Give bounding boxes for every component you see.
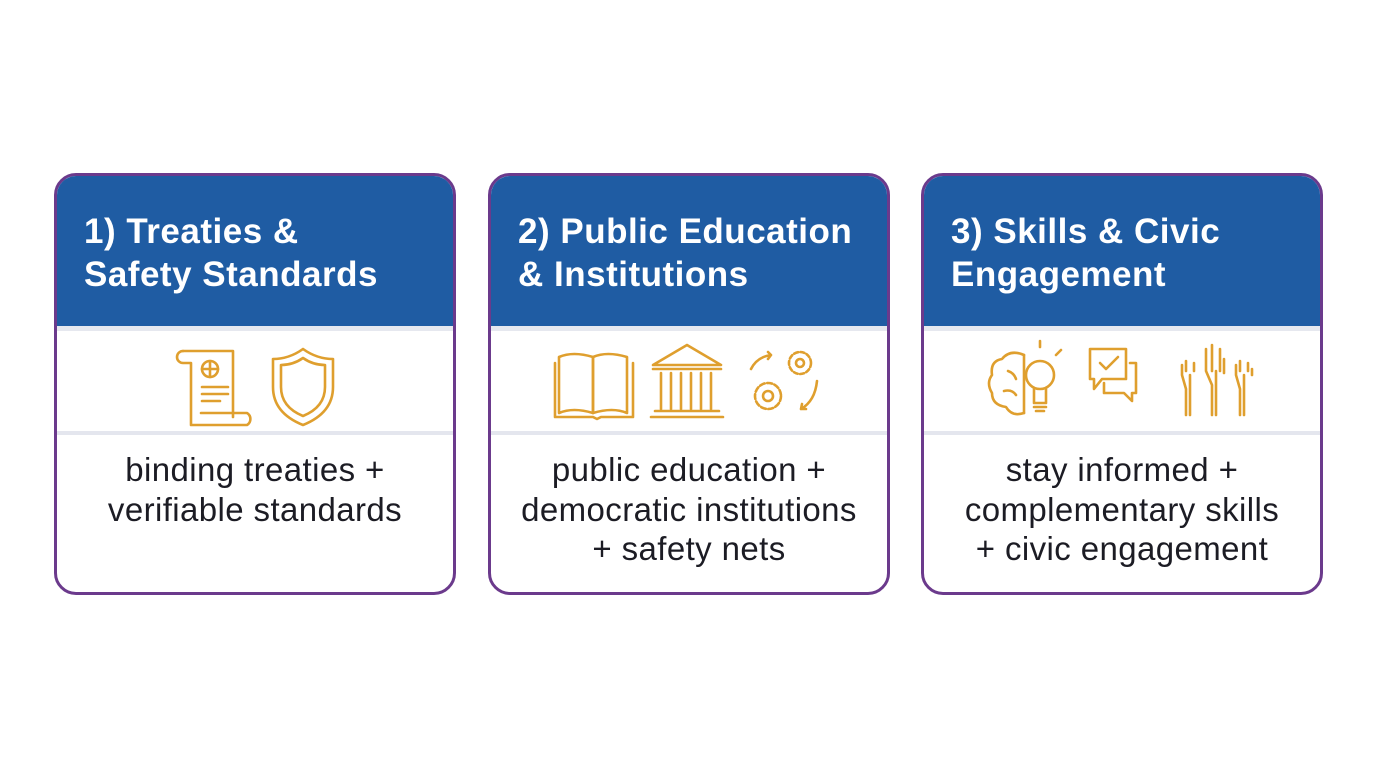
- text 3: [965, 451, 1279, 567]
- icons 3: [988, 340, 1254, 416]
- text 2: democratic institutions: [521, 490, 857, 528]
- icon: treaty scroll: [177, 351, 250, 425]
- header 2: [491, 176, 887, 331]
- header 1: [57, 176, 453, 331]
- icon: gears: [751, 352, 817, 409]
- icons 2: [554, 344, 818, 420]
- icon: book: [555, 354, 633, 419]
- card 3: skills: [921, 173, 1323, 595]
- header 2: 2) Public Education: [518, 212, 852, 251]
- text 1: binding treaties +: [125, 451, 385, 488]
- header 3: Engagement: [951, 255, 1166, 294]
- text 3: stay informed +: [1006, 451, 1238, 488]
- text 3: complementary skills: [965, 490, 1279, 528]
- header 3: [924, 176, 1320, 331]
- icon: raised hands: [1182, 345, 1252, 415]
- header 2: & Institutions: [518, 255, 749, 294]
- header 1: 1) Treaties &: [84, 212, 299, 251]
- icon: shield: [273, 349, 333, 425]
- header 1: Safety Standards: [84, 255, 378, 294]
- icon: institution: [651, 345, 723, 417]
- text 2: + safety nets: [592, 530, 786, 567]
- text 1: [108, 451, 402, 528]
- icons 1: [176, 348, 334, 426]
- header 3: 3) Skills & Civic: [951, 212, 1220, 251]
- card 1: treaties: [54, 173, 456, 595]
- text 2: public education +: [552, 451, 826, 488]
- text 3: + civic engagement: [976, 530, 1268, 567]
- text 1: verifiable standards: [108, 490, 402, 528]
- icon: chat check: [1090, 349, 1136, 401]
- card 2: education: [488, 173, 890, 595]
- text 2: [521, 451, 857, 567]
- icon: brain and bulb: [989, 341, 1061, 414]
